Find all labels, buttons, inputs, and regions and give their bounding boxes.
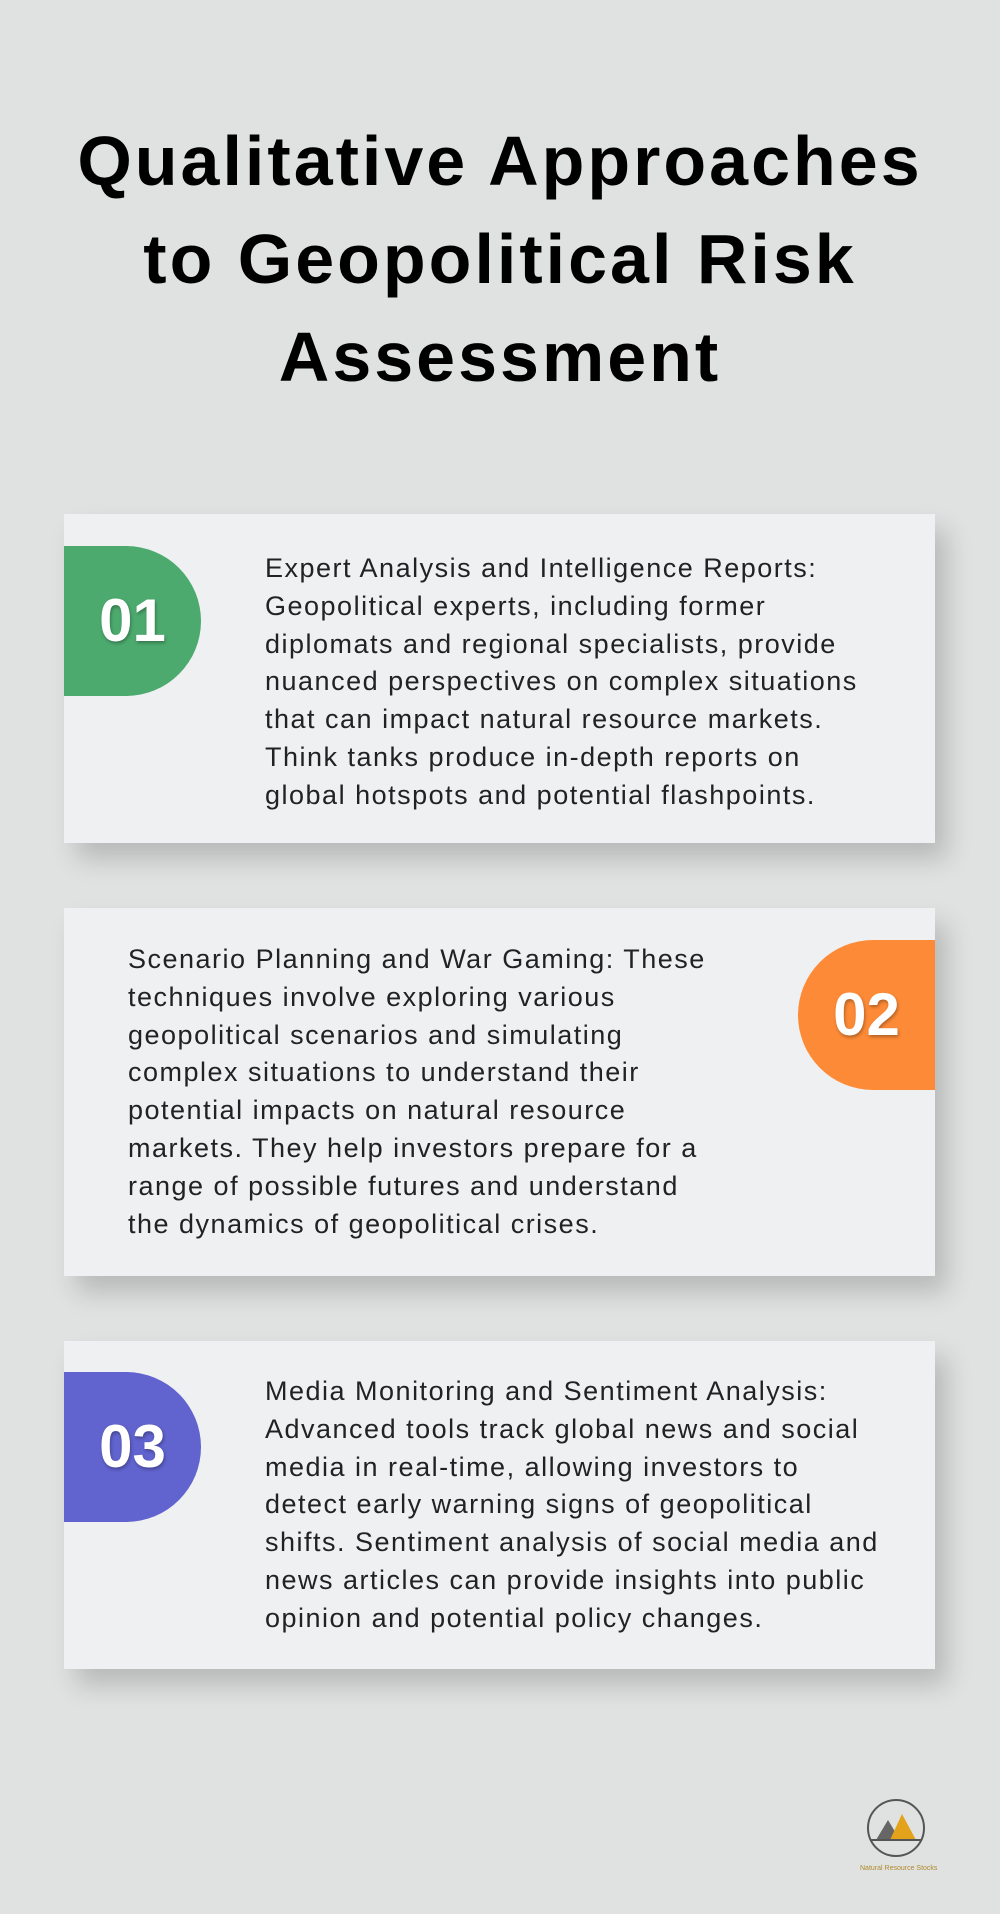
badge 03: 03 xyxy=(99,1413,166,1480)
text: scenario planning xyxy=(128,944,706,1239)
badge 01 xyxy=(64,546,201,696)
text: media monitoring: media in real-time, allowing investors to xyxy=(265,1452,799,1482)
panel: card 1 xyxy=(64,514,935,843)
text: scenario planning: complex situations to understand their xyxy=(128,1057,640,1087)
logo xyxy=(860,1799,938,1872)
text: scenario planning: geopolitical scenarios and simulating xyxy=(128,1020,623,1050)
title xyxy=(77,122,923,396)
text: expert analysis: Think tanks produce in-depth reports on xyxy=(265,742,801,772)
text: expert analysis: that can impact natural resource markets. xyxy=(265,704,823,734)
panel: card 3 xyxy=(64,1341,935,1669)
text: expert analysis: Geopolitical experts, including former xyxy=(265,591,766,621)
title: Assessment xyxy=(279,318,721,396)
badge 01: 01 xyxy=(99,587,166,654)
text: expert analysis: global hotspots and potential flashpoints. xyxy=(265,780,816,810)
text: media monitoring: Media Monitoring and Sentiment Analysis: xyxy=(265,1376,828,1406)
title: Qualitative Approaches xyxy=(77,122,923,200)
badge 03 xyxy=(64,1372,201,1522)
text: media monitoring xyxy=(265,1376,879,1633)
text: scenario planning: markets. They help investors prepare for a xyxy=(128,1133,698,1163)
panel: card 2 xyxy=(64,908,935,1276)
text: scenario planning: range of possible futures and understand xyxy=(128,1171,679,1201)
title: to Geopolitical Risk xyxy=(143,220,857,298)
text: expert analysis: nuanced perspectives on complex situations xyxy=(265,666,858,696)
text: media monitoring: shifts. Sentiment analysis of social media and xyxy=(265,1527,879,1557)
text: expert analysis: diplomats and regional specialists, provide xyxy=(265,629,837,659)
text: expert analysis: Expert Analysis and Intelligence Reports: xyxy=(265,553,817,583)
text: scenario planning: Scenario Planning and War Gaming: These xyxy=(128,944,706,974)
text: scenario planning: techniques involve exploring various xyxy=(128,982,616,1012)
text: scenario planning: potential impacts on natural resource xyxy=(128,1095,626,1125)
badge 02 xyxy=(798,940,935,1090)
text: expert analysis xyxy=(265,553,858,810)
text: media monitoring: opinion and potential policy changes. xyxy=(265,1603,763,1633)
text: media monitoring: Advanced tools track global news and social xyxy=(265,1414,859,1444)
text: media monitoring: detect early warning signs of geopolitical xyxy=(265,1489,813,1519)
logo: Natural Resource Stocks xyxy=(860,1865,937,1872)
text: media monitoring: news articles can provide insights into public xyxy=(265,1565,865,1595)
badge 02: 02 xyxy=(833,981,900,1048)
text: scenario planning: the dynamics of geopolitical crises. xyxy=(128,1209,599,1239)
